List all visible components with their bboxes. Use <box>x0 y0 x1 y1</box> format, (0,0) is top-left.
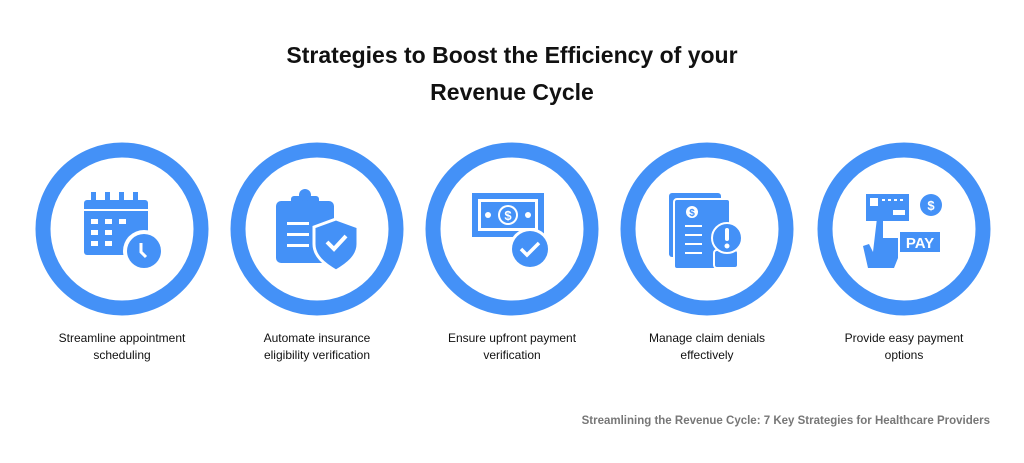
label 3: verification <box>483 348 541 362</box>
icon: documents with alert: $ <box>689 208 695 219</box>
ring 4 <box>628 150 786 308</box>
icon: pay terminal with hand: PAY <box>906 235 934 252</box>
icon: pay terminal with hand <box>863 194 942 268</box>
ring 5 <box>825 150 983 308</box>
label 5: options <box>885 348 923 362</box>
ring 3 <box>433 150 591 308</box>
icon: banknote with check: $ <box>504 208 512 223</box>
panel: insurance verification <box>238 150 396 362</box>
icon: pay terminal with hand: $ <box>927 198 935 213</box>
panel: appointment scheduling <box>43 150 201 362</box>
label 1: Streamline appointment <box>59 331 185 345</box>
label 4: Manage claim denials <box>649 331 765 345</box>
label 2: Automate insurance <box>264 331 370 345</box>
label 5: Provide easy payment <box>845 331 963 345</box>
ring 2 <box>238 150 396 308</box>
label 2: eligibility verification <box>264 348 370 362</box>
label 3: Ensure upfront payment <box>448 331 576 345</box>
title: Revenue Cycle <box>430 79 594 105</box>
panel: upfront payment <box>433 150 591 362</box>
icon: clipboard with shield <box>276 189 358 271</box>
panel: payment options <box>825 150 983 362</box>
title <box>286 42 738 105</box>
panel: claim denials <box>628 150 786 362</box>
title: Strategies to Boost the Efficiency of your <box>286 42 738 68</box>
icon: calendar with clock <box>84 192 165 272</box>
label 4: effectively <box>680 348 734 362</box>
icon: documents with alert <box>669 193 742 269</box>
ring 1 <box>43 150 201 308</box>
label 1: scheduling <box>93 348 151 362</box>
icon: banknote with check <box>472 193 551 270</box>
footer: Streamlining the Revenue Cycle: 7 Key Strategies for Healthcare Providers <box>582 415 990 427</box>
